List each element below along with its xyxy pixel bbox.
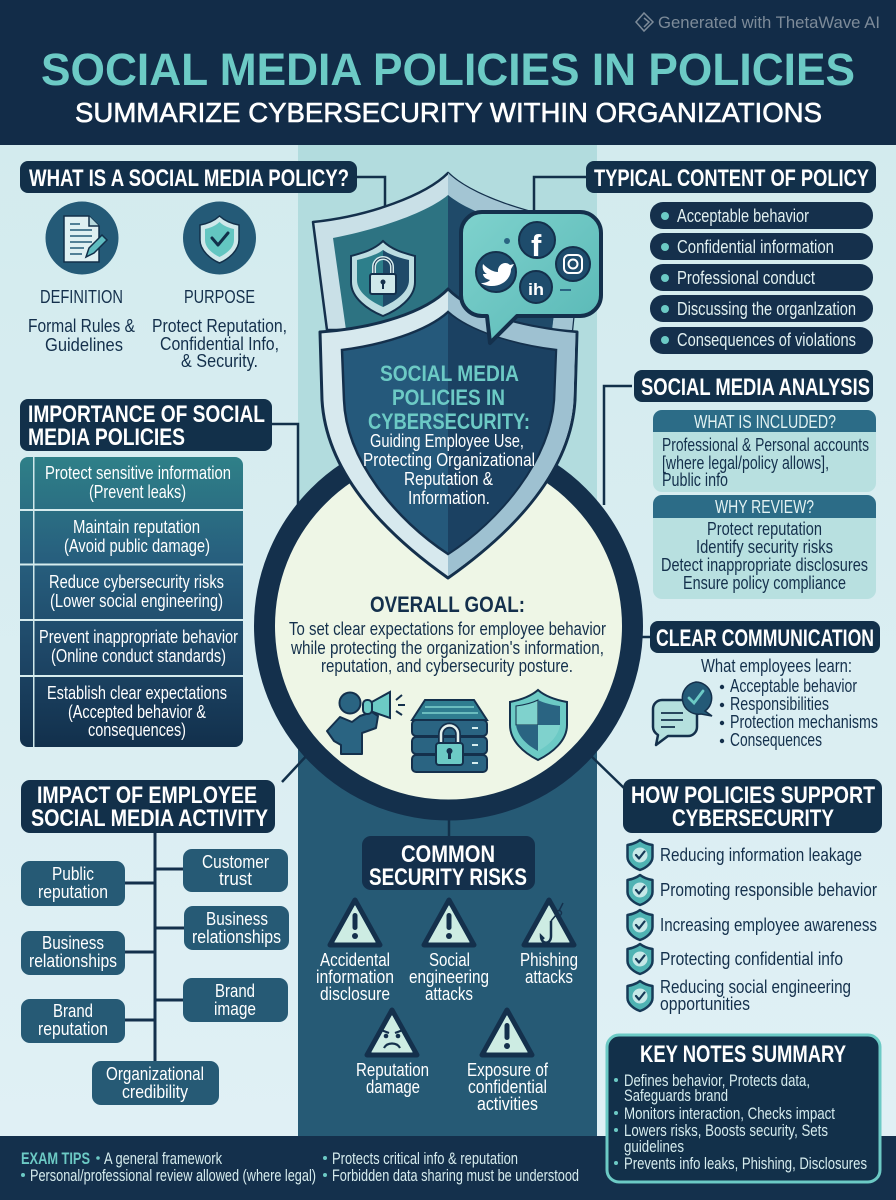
card: what is included: WHAT IS INCLUDED? <box>694 412 836 432</box>
tips text: Personal/professional review allowed (where legal) <box>30 1166 316 1185</box>
icon: instagram <box>556 247 590 281</box>
check item <box>628 875 877 905</box>
check item: Reducing social engineering <box>660 976 851 997</box>
row text: (Avoid public damage) <box>64 535 210 556</box>
node: reputation <box>38 1018 108 1039</box>
shield text: Reputation & <box>404 468 494 489</box>
header band <box>0 0 896 145</box>
risk: accidental disclosure: information <box>316 966 394 987</box>
shield title: POLICIES IN <box>392 385 505 410</box>
panel: social media analysis <box>634 370 876 599</box>
shield text <box>363 430 535 508</box>
heading <box>20 399 272 451</box>
title: SOCIAL MEDIA POLICIES IN POLICIES <box>41 44 855 95</box>
risk: reputation damage <box>356 1010 429 1097</box>
goal text: reputation, and cybersecurity posture. <box>321 655 573 676</box>
tips text: A general framework <box>104 1149 222 1168</box>
bullet list: Acceptable behavior <box>730 675 857 696</box>
card: what is included: Public info <box>662 469 728 490</box>
intro text: What employees learn: <box>701 655 852 676</box>
row text: Prevent inappropriate behavior <box>39 626 238 647</box>
definition label: DEFINITION <box>40 286 123 307</box>
shield text: Guiding Employee Use, <box>370 430 524 451</box>
card: why review <box>653 495 876 599</box>
back shield <box>313 173 583 330</box>
key notes list: Monitors interaction, Checks impact <box>624 1104 835 1123</box>
node: Public <box>52 863 94 884</box>
heading: IMPORTANCE OF SOCIAL <box>28 401 265 428</box>
icon: quartered shield <box>510 690 567 760</box>
list item <box>650 202 873 229</box>
risk: reputation damage: damage <box>366 1076 420 1097</box>
row text: Reduce cybersecurity risks <box>49 571 224 592</box>
list item: Professional conduct <box>677 268 815 288</box>
risk: social engineering: Social <box>429 949 470 970</box>
panel: typical content of policy <box>586 161 876 354</box>
row text: Maintain reputation <box>73 516 200 537</box>
goal text <box>289 618 606 676</box>
node: Customer <box>202 851 269 872</box>
heading: CYBERSECURITY <box>672 805 834 832</box>
panel: what is a social media policy <box>20 161 357 371</box>
risk: phishing: Phishing <box>520 949 578 970</box>
row text <box>47 682 227 740</box>
purpose text: Confidential Info, <box>160 333 279 354</box>
list item <box>650 327 873 354</box>
icon: twitter bird <box>476 252 516 292</box>
risk: exposure of confidential activities <box>467 1010 549 1114</box>
icon: document and pencil <box>46 202 118 274</box>
heading: COMMON <box>401 841 495 868</box>
node <box>21 861 125 906</box>
risk: exposure of confidential activities: activities <box>477 1093 538 1114</box>
icon: chat bubbles <box>653 682 712 745</box>
node: trust <box>219 868 252 889</box>
bottom band: exam tips <box>0 1136 896 1200</box>
goal text: while protecting the organization's information, <box>290 637 604 658</box>
panel: impact of employee social media activity <box>21 780 289 1105</box>
panel: how policies support cybersecurity <box>623 779 882 1014</box>
bullet list: Responsibilities <box>730 693 829 714</box>
risk: social engineering: attacks <box>425 983 473 1004</box>
node: Brand <box>215 980 255 1001</box>
front shield <box>320 289 577 578</box>
key notes list: Safeguards brand <box>624 1086 728 1105</box>
tips text: Forbidden data sharing must be understood <box>332 1166 579 1185</box>
risk: exposure of confidential activities: Exposure of <box>467 1059 549 1080</box>
speech bubble with social icons <box>461 212 601 343</box>
stacked rows background <box>20 457 243 747</box>
subtitle: SUMMARIZE CYBERSECURITY WITHIN ORGANIZATIONS <box>75 97 822 128</box>
check item <box>628 976 851 1014</box>
central goal circle <box>264 442 632 810</box>
key notes list: Lowers risks, Boosts security, Sets <box>624 1121 828 1140</box>
node: credibility <box>122 1081 189 1102</box>
card: why review: Identify security risks <box>696 536 833 557</box>
icon: server with padlock <box>412 700 487 772</box>
check item: opportunities <box>660 993 750 1014</box>
risk: reputation damage: Reputation <box>356 1059 429 1080</box>
connector lines <box>270 177 652 838</box>
definition text <box>28 315 136 355</box>
definition text: Guidelines <box>45 334 123 355</box>
row text <box>49 571 224 611</box>
icon: linkedin: ih <box>528 280 544 299</box>
icon: person with megaphone <box>327 692 405 754</box>
list item: Discussing the organlzation <box>677 299 856 319</box>
risk: social engineering: engineering <box>409 966 489 987</box>
purpose text: & Security. <box>181 350 258 371</box>
list item: Confidential information <box>677 237 834 257</box>
heading: SECURITY RISKS <box>369 864 527 891</box>
card: what is included: [where legal/policy allows], <box>662 452 829 473</box>
goal heading: OVERALL GOAL: <box>370 592 525 617</box>
definition text: Formal Rules & <box>28 315 136 336</box>
node: Brand <box>53 1000 93 1021</box>
card: what is included <box>653 410 876 492</box>
row text: Protect sensitive information <box>45 462 231 483</box>
heading: MEDIA POLICIES <box>28 424 185 451</box>
panel: clear communication <box>650 621 880 750</box>
node: Organizational <box>106 1063 204 1084</box>
risk: phishing <box>520 900 578 987</box>
panel: importance of social media policies <box>20 399 272 747</box>
row text <box>39 626 238 666</box>
heading: WHAT IS A SOCIAL MEDIA POLICY? <box>29 165 349 192</box>
check item <box>628 840 862 870</box>
heading <box>21 780 275 833</box>
heading <box>362 836 535 891</box>
node: relationships <box>29 950 117 971</box>
heading <box>623 779 882 833</box>
tips text: Protects critical info & reputation <box>332 1149 518 1168</box>
goal text: To set clear expectations for employee behavior <box>289 618 606 639</box>
heading: IMPACT OF EMPLOYEE <box>37 782 257 809</box>
node: reputation <box>38 881 108 902</box>
purpose text <box>152 315 287 371</box>
node <box>184 906 289 950</box>
row text: (Online conduct standards) <box>51 645 226 666</box>
shield text: Information. <box>408 487 490 508</box>
risk: accidental disclosure: Accidental <box>320 949 390 970</box>
shield text: Protecting Organizational <box>363 449 535 470</box>
node <box>183 978 288 1022</box>
row text: (Accepted behavior & <box>68 701 207 722</box>
purpose label: PURPOSE <box>184 286 255 307</box>
shield title <box>368 361 530 434</box>
tips text <box>21 1149 579 1185</box>
key notes list <box>614 1071 867 1173</box>
list item: Consequences of violations <box>677 330 856 350</box>
row text <box>45 462 231 502</box>
shield title: SOCIAL MEDIA <box>380 361 519 386</box>
node <box>183 849 288 892</box>
row text: (Prevent leaks) <box>89 481 186 502</box>
card: why review: WHY REVIEW? <box>715 497 814 517</box>
bullet list: Consequences <box>730 729 822 750</box>
heading: SOCIAL MEDIA ACTIVITY <box>31 805 268 832</box>
node: Business <box>206 908 268 929</box>
shield title: CYBERSECURITY: <box>368 409 530 434</box>
row text: consequences) <box>88 719 186 740</box>
card: why review: Ensure policy compliance <box>683 572 846 593</box>
purpose text: Protect Reputation, <box>152 315 287 336</box>
watermark: Generated with ThetaWave AI <box>658 13 880 32</box>
panel: key notes summary <box>607 1035 880 1182</box>
list item: Acceptable behavior <box>677 206 809 226</box>
central shields <box>313 173 601 578</box>
list item <box>650 264 873 291</box>
icon: small shield with padlock <box>351 241 415 316</box>
card: why review: Protect reputation <box>707 518 822 539</box>
heading <box>20 161 357 193</box>
check item: Protecting confidential info <box>660 948 843 969</box>
row text <box>64 516 210 556</box>
icon: shield check <box>183 202 256 274</box>
list item <box>650 295 873 322</box>
check item <box>628 910 877 940</box>
trunk lines <box>125 830 184 1062</box>
key notes list: Defines behavior, Protects data, <box>624 1071 810 1090</box>
node <box>21 931 125 975</box>
risk: exposure of confidential activities: confidential <box>468 1076 547 1097</box>
risk: social engineering <box>409 900 489 1004</box>
check item <box>628 944 843 974</box>
node: relationships <box>192 926 281 947</box>
risk: accidental disclosure: disclosure <box>320 983 390 1004</box>
icon: facebook: f <box>531 228 542 263</box>
risk: phishing: attacks <box>525 966 573 987</box>
node: image <box>214 998 256 1019</box>
exam tips label: EXAM TIPS <box>21 1149 90 1168</box>
key notes list: guidelines <box>624 1137 684 1156</box>
row text: Establish clear expectations <box>47 682 227 703</box>
bullet list <box>720 675 878 750</box>
node: Business <box>42 932 104 953</box>
list item <box>650 233 873 260</box>
node <box>92 1061 219 1105</box>
row text: (Lower social engineering) <box>50 590 223 611</box>
panel: common security risks <box>316 836 578 1114</box>
node <box>21 999 125 1043</box>
risk: accidental disclosure <box>316 900 394 1004</box>
